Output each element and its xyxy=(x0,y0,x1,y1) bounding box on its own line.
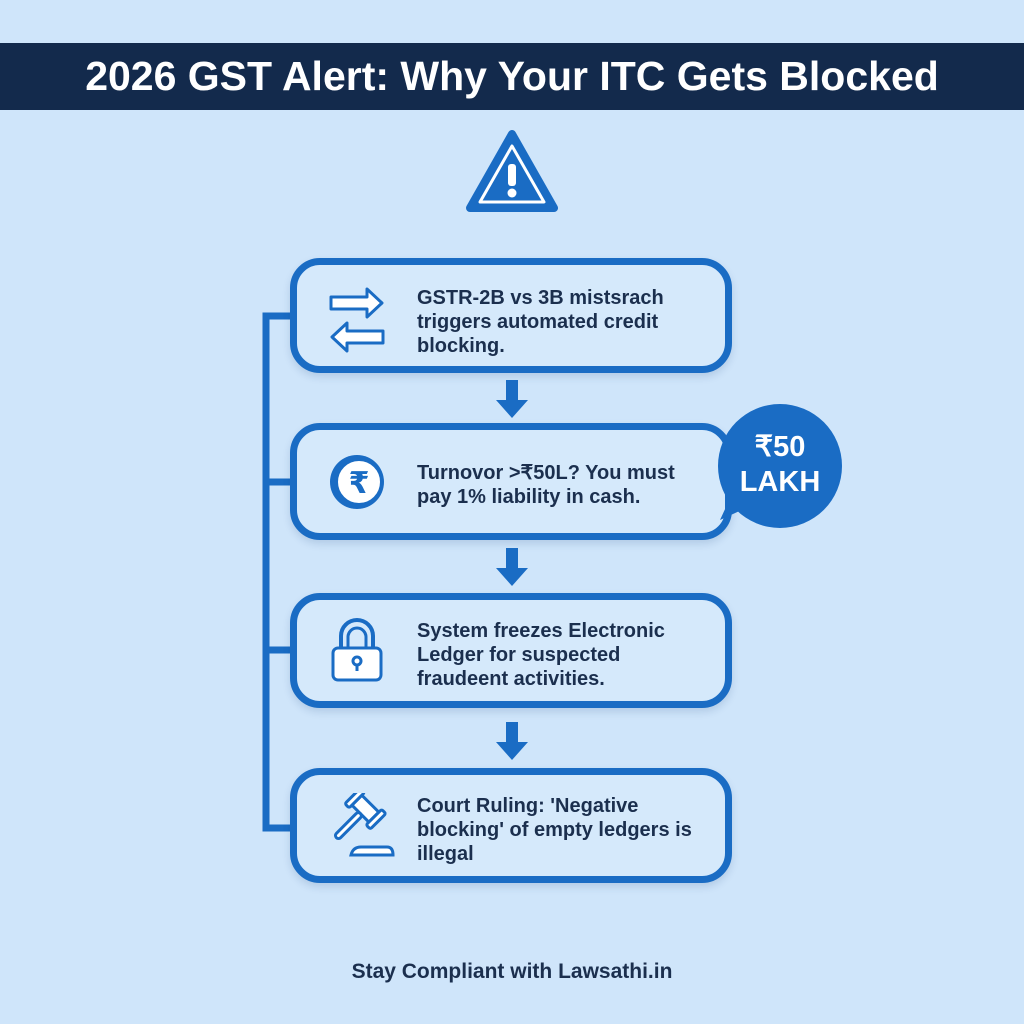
callout badge: LAKH xyxy=(740,466,820,498)
text xyxy=(417,795,692,865)
text: blocking. xyxy=(417,335,505,357)
arrow 3 xyxy=(496,722,528,760)
panel: mismatch xyxy=(290,258,732,373)
callout badge xyxy=(718,404,842,528)
text: GSTR-2B vs 3B mistsrach xyxy=(417,287,664,309)
text: Ledger for suspected xyxy=(417,644,620,666)
text: System freezes Electronic xyxy=(417,620,665,642)
text: Turnovor >₹50L? You must xyxy=(417,462,675,484)
title: 2026 GST Alert: Why Your ITC Gets Blocked xyxy=(85,53,939,99)
text xyxy=(417,620,665,690)
panel: ledger freeze xyxy=(290,593,732,708)
icon: arrows xyxy=(330,288,384,353)
panel: turnover xyxy=(290,423,732,540)
icon: rupee coin: ₹ xyxy=(349,466,369,501)
icon: padlock xyxy=(332,618,382,682)
text: blocking' of empty ledgers is xyxy=(417,819,692,841)
icon: warning xyxy=(466,130,558,212)
icon: gavel xyxy=(334,793,394,856)
text: triggers automated credit xyxy=(417,311,658,333)
text: fraudeent activities. xyxy=(417,668,605,690)
title xyxy=(0,43,1024,110)
connector line xyxy=(262,312,290,832)
text: pay 1% liability in cash. xyxy=(417,486,640,508)
panel: court ruling xyxy=(290,768,732,883)
text xyxy=(417,287,664,357)
arrow 1 xyxy=(496,380,528,418)
callout badge: ₹50 xyxy=(755,431,805,463)
text: Court Ruling: 'Negative xyxy=(417,795,638,817)
text: illegal xyxy=(417,843,474,865)
icon: rupee coin xyxy=(330,455,384,509)
footer: Stay Compliant with Lawsathi.in xyxy=(352,960,672,983)
arrow 2 xyxy=(496,548,528,586)
text xyxy=(417,462,675,508)
